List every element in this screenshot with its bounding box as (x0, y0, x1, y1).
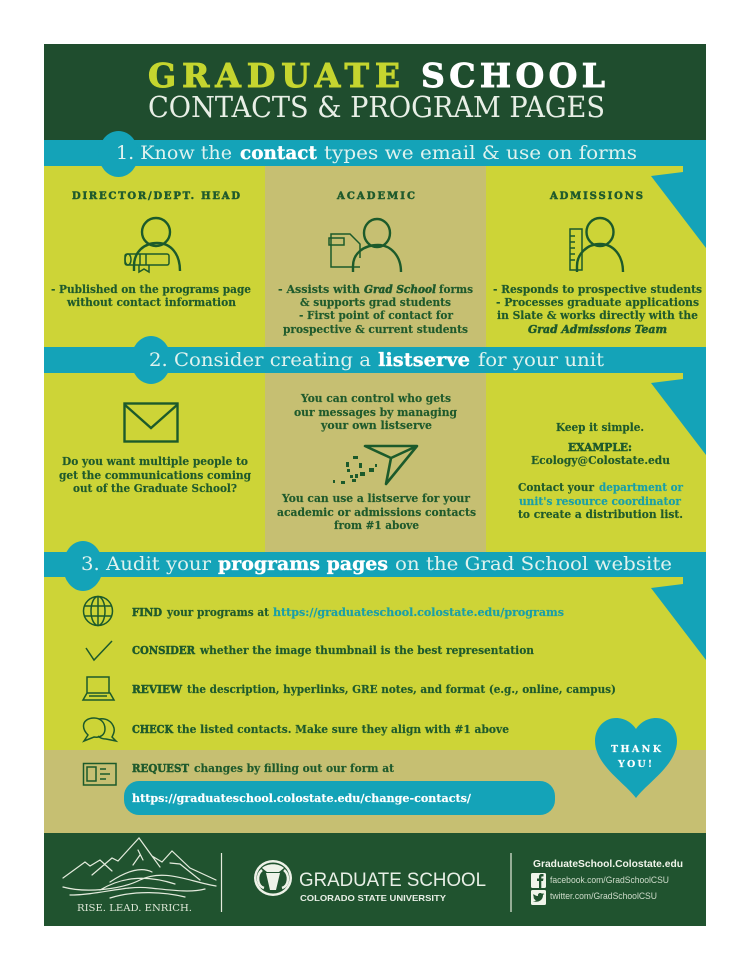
icon: globe (84, 596, 112, 626)
step: request: changes by filling out our form at (194, 762, 394, 775)
footer: mountains logo (63, 838, 216, 914)
step: consider: whether the image thumbnail is the best representation (199, 644, 534, 657)
step: consider (86, 641, 534, 660)
column: admissions: ADMISSIONS (549, 191, 643, 202)
icon: person with document (329, 219, 401, 272)
heart: thank you: THANK (611, 744, 662, 755)
header band (44, 44, 706, 140)
title: GRADUATE (148, 56, 400, 95)
step: consider: CONSIDER (132, 644, 196, 657)
footer divider left (220, 853, 222, 912)
footer divider right (510, 853, 512, 912)
banner 3: on the Grad School website (395, 554, 672, 575)
listserve control text: your own listserve (320, 419, 432, 432)
icon: person with diploma (125, 218, 180, 272)
column: admissions: - Responds to prospective students (493, 283, 702, 296)
listserve question (59, 404, 251, 495)
step: check: CHECK (132, 723, 174, 736)
column: director/dept. head: without contact information (66, 296, 236, 309)
step: review: the description, hyperlinks, GRE notes, and format (e.g., online, campus) (187, 683, 616, 696)
listserve control text: our messages by managing (294, 406, 457, 419)
icon: laptop (83, 677, 114, 700)
step: check: the listed contacts. Make sure they align with #1 above (177, 723, 509, 736)
icon: envelope (124, 404, 178, 442)
listserve example text (518, 421, 683, 521)
footer: social links: twitter.com/GradSchoolCSU (550, 891, 657, 902)
listserve example text: EXAMPLE: (568, 441, 632, 454)
icon: facebook (531, 873, 546, 888)
listserve control text (277, 392, 476, 532)
footer: CSU logo: COLORADO STATE UNIVERSITY (300, 893, 446, 903)
step: review: REVIEW (132, 683, 183, 696)
title: SCHOOL (421, 56, 605, 95)
banner 1 (44, 131, 706, 248)
footer: social links (531, 858, 683, 905)
column: academic (278, 191, 473, 336)
listserve example text: department or (599, 481, 683, 494)
footer: CSU logo (254, 860, 486, 903)
icon: paper plane with dots (333, 446, 417, 484)
listserve control text: from #1 above (334, 519, 419, 532)
column: academic: - First point of contact for (299, 309, 453, 322)
step: find: FIND (132, 606, 162, 619)
listserve question: out of the Graduate School? (73, 482, 237, 495)
banner 1: contact (240, 143, 317, 164)
step: find: https://graduateschool.colostate.edu/programs (273, 606, 564, 619)
column: admissions: in Slate & works directly with the (497, 309, 698, 322)
heart: thank you: YOU! (617, 759, 652, 770)
icon: person with ruler (570, 218, 623, 272)
listserve control text: You can control who gets (300, 392, 451, 405)
title (148, 56, 605, 124)
heart: thank you (595, 718, 677, 798)
icon: chat bubbles (84, 718, 116, 741)
icon: form (84, 764, 116, 785)
step: find (84, 596, 564, 626)
listserve example text: to create a distribution list. (518, 508, 683, 521)
banner 2: listserve (378, 350, 470, 371)
listserve control text: academic or admissions contacts (277, 506, 476, 519)
column: director/dept. head: - Published on the programs page (51, 283, 251, 296)
title: CONTACTS & PROGRAM PAGES (148, 91, 605, 124)
banner 3: 3. Audit your (81, 554, 211, 575)
listserve question: get the communications coming (59, 469, 251, 482)
listserve example text: Ecology@Colostate.edu (531, 454, 670, 467)
column: academic: forms (439, 283, 473, 296)
banner 2 (44, 336, 706, 455)
step: find: your programs at (166, 606, 269, 619)
listserve example text: Contact your (518, 481, 594, 494)
column: academic: - Assists with (278, 283, 360, 296)
footer: social links: facebook.com/GradSchoolCSU (550, 875, 669, 886)
tan column: academic (265, 166, 486, 347)
footer: CSU logo: GRADUATE SCHOOL (299, 869, 486, 891)
icon: check mark (86, 641, 112, 660)
column: academic: & supports grad students (300, 296, 451, 309)
banner 1: types we email & use on forms (324, 143, 637, 164)
banner 3 (44, 541, 706, 660)
listserve control text: You can use a listserve for your (281, 492, 470, 505)
column: academic: prospective & current students (283, 323, 468, 336)
column: admissions: - Processes graduate applications (496, 296, 699, 309)
banner 1: 1. Know the (116, 143, 232, 164)
step: review (83, 677, 616, 700)
banner 3: programs pages (218, 554, 388, 575)
tan band: request (44, 750, 706, 833)
icon: ram (254, 860, 292, 896)
listserve example text: unit's resource coordinator (519, 495, 681, 508)
step: check (84, 718, 509, 741)
footer: social links: GraduateSchool.Colostate.edu (533, 858, 683, 870)
link pill: https://graduateschool.colostate.edu/change-contacts/ (132, 792, 471, 805)
icon: twitter (531, 890, 546, 905)
column: director/dept. head: DIRECTOR/DEPT. HEAD (72, 191, 240, 202)
column: academic: Grad School (364, 283, 436, 296)
step: request: REQUEST (132, 762, 189, 775)
banner 2: for your unit (478, 350, 605, 371)
column: director/dept. head (51, 191, 251, 309)
tan column: listserve (265, 373, 486, 552)
column: admissions (493, 191, 702, 336)
listserve example text: Keep it simple. (556, 421, 644, 434)
footer: mountains logo: RISE. LEAD. ENRICH. (77, 903, 192, 914)
listserve question: Do you want multiple people to (62, 455, 248, 468)
link pill (124, 781, 555, 815)
column: academic: ACADEMIC (336, 191, 415, 202)
banner 2: 2. Consider creating a (149, 350, 371, 371)
column: admissions: Grad Admissions Team (528, 323, 667, 336)
footer band (44, 833, 706, 926)
step: request (84, 762, 555, 815)
